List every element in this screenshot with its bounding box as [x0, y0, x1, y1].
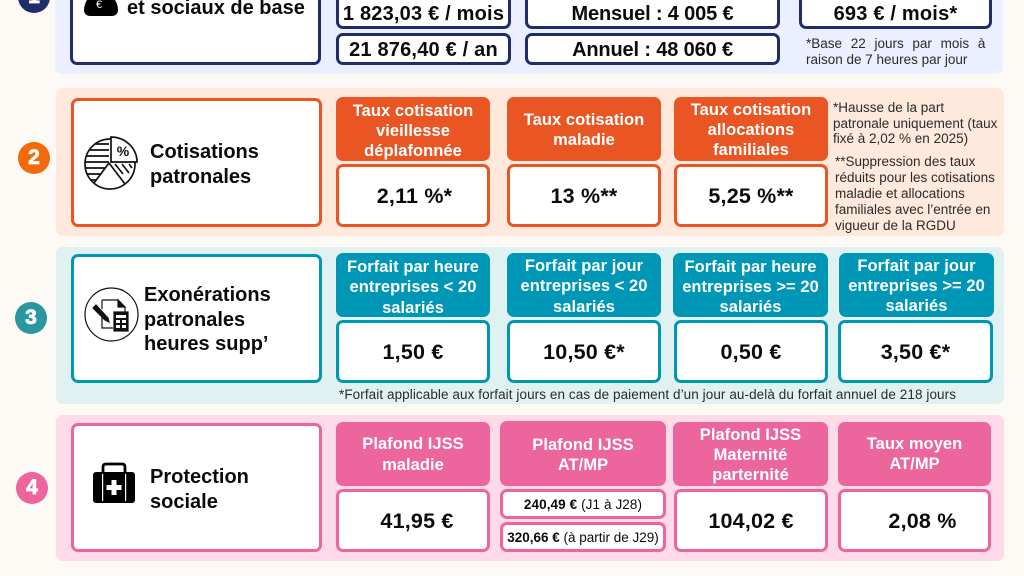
panel: protection sociale: [56, 415, 1004, 561]
value: 104,02: [674, 489, 828, 552]
value: 41,95: [336, 489, 490, 552]
footnote: suppression des taux: [835, 154, 995, 233]
footnote: suppression des taux: familiales avec l’entrée en: [835, 202, 990, 217]
value: 320,66: 320,66 € (à partir de J29): [507, 530, 659, 544]
heading: cotisations patronales: patronales: [150, 166, 251, 188]
value: 240,49: 240,49 € (J1 à J28): [524, 497, 642, 512]
icon: first aid kit: [93, 462, 135, 503]
value: 3,50: [838, 320, 993, 383]
header: maladie: [507, 97, 661, 161]
header: IJSS maternite: Plafond IJSS: [700, 426, 801, 444]
footnote: suppression des taux: réduits pour les cotisations: [835, 170, 995, 185]
heading: cotisations patronales: Cotisations: [150, 141, 259, 163]
footnote: base 22 jours: [806, 36, 986, 67]
header: allocations familiales: [674, 97, 828, 161]
header: forfait heure 20 et plus: salariés: [720, 298, 781, 316]
header: forfait heure moins de 20: Forfait par heure: [347, 258, 479, 276]
header: forfait heure moins de 20: entreprises < 20: [350, 278, 476, 296]
header: taux moyen: AT/MP: [889, 455, 940, 473]
value: salaire mois: [336, 0, 511, 29]
header: allocations familiales: Taux cotisation: [691, 101, 811, 119]
heading: exonerations patronales: heures supp’: [144, 333, 268, 355]
value: annuel: [525, 33, 780, 65]
header: forfait heure 20 et plus: entreprises >= 20: [682, 278, 819, 296]
value: 1,50: [336, 320, 490, 383]
value: 2,08: [838, 489, 991, 552]
value: vieillesse: 2,11 %*: [377, 184, 452, 208]
header: IJSS AT/MP: Plafond IJSS: [532, 436, 634, 454]
footnote: hausse part patronale: *Hausse de la part: [833, 100, 944, 115]
number badge 3: [15, 302, 47, 334]
header: forfait jour moins de 20: entreprises < 20: [521, 277, 647, 295]
header: forfait jour 20 et plus: Forfait par jour: [857, 257, 976, 275]
number badge 4: 4: [26, 476, 38, 499]
header: forfait heure 20 et plus: [673, 253, 828, 317]
footnote: forfait jours: *Forfait applicable aux forfait jours en cas de paiement d’un jour au-delà du forfait annuel de 218 jours: [339, 387, 956, 402]
footnote: suppression des taux: vigueur de la RGDU: [835, 218, 956, 233]
header: allocations familiales: allocations: [708, 121, 794, 139]
icon: money bag: [84, 0, 118, 16]
panel: cotisations patronales: [56, 88, 1004, 236]
number badge 2: [18, 142, 50, 174]
header: forfait jour 20 et plus: salariés: [886, 297, 947, 315]
header: IJSS maternite: parternité: [712, 466, 789, 484]
header: IJSS maladie: maladie: [382, 456, 444, 474]
footnote: suppression des taux: maladie et allocations: [835, 186, 965, 201]
heading: protection sociale: [150, 466, 249, 513]
title box: protection sociale: [71, 423, 322, 552]
value: 0,50: 0,50 €: [720, 340, 781, 364]
icon: document and calculator: [84, 287, 139, 342]
header: IJSS maternite: Maternité: [714, 446, 787, 464]
header: taux moyen: Taux moyen: [867, 435, 962, 453]
number badge 3: 3: [25, 306, 37, 329]
heading: exonerations patronales: patronales: [144, 309, 245, 331]
panel: salaires de base: [55, 0, 1003, 74]
value: 320,66: [500, 522, 666, 552]
header: maladie: Taux cotisation: [524, 111, 644, 129]
header: forfait jour moins de 20: [507, 253, 661, 317]
footnote: base 22 jours: *Base 22 jours par mois à: [806, 36, 985, 51]
value: mensuel: Mensuel : 4 005 €: [572, 3, 733, 25]
header: IJSS maternite: [673, 422, 828, 486]
value: 41,95: 41,95 €: [380, 508, 454, 532]
value: maladie: 13 %**: [551, 184, 617, 208]
title box: cotisations patronales: [71, 98, 322, 227]
value: maladie: [507, 164, 661, 227]
header: IJSS maladie: Plafond IJSS: [362, 435, 464, 453]
heading: exonerations patronales: [144, 284, 271, 355]
title box: exonerations: [71, 254, 322, 383]
value: allocations familiales: 5,25 %**: [708, 184, 794, 208]
value: annuel: Annuel : 48 060 €: [572, 38, 733, 60]
header: vieillesse: [336, 97, 490, 161]
header: allocations familiales: familiales: [713, 141, 789, 159]
value: mensuel: [525, 0, 780, 29]
header: forfait heure 20 et plus: Forfait par heure: [684, 258, 816, 276]
footnote: hausse part patronale: patronale uniquement (taux: [833, 116, 997, 131]
header: IJSS AT/MP: AT/MP: [558, 456, 608, 474]
header: forfait jour moins de 20: salariés: [553, 298, 615, 316]
title box: salaires et sociaux de base: [70, 0, 321, 65]
heading: exonerations patronales: Exonérations: [144, 284, 271, 306]
footnote: hausse part patronale: [833, 100, 998, 146]
value: salaire an: 21 876,40 € / an: [349, 38, 498, 60]
header: taux moyen: [838, 422, 991, 486]
value: 3,50: 3,50 €*: [881, 340, 950, 364]
header: forfait jour 20 et plus: entreprises >= 20: [848, 277, 985, 295]
heading: cotisations patronales: [150, 141, 259, 188]
value: 10,50: [507, 320, 661, 383]
value: 1,50: 1,50 €: [382, 340, 443, 364]
number badge 2: 2: [28, 146, 40, 169]
value: salaire mois: 1 823,03 € / mois: [343, 3, 504, 25]
value: allocations familiales: [674, 164, 828, 227]
value: vieillesse: [336, 164, 490, 227]
header: forfait heure moins de 20: [336, 253, 490, 317]
footnote: base 22 jours: raison de 7 heures par jour: [806, 52, 967, 67]
heading: protection sociale: sociale: [150, 491, 218, 513]
header: vieillesse: vieillesse: [376, 122, 450, 140]
value: 240,49: [500, 489, 666, 519]
value: 104,02: 104,02 €: [708, 508, 794, 532]
heading: protection sociale: Protection: [150, 466, 249, 488]
value: 693 euros par mois: [799, 0, 992, 29]
header: maladie: maladie: [553, 131, 615, 149]
header: vieillesse: Taux cotisation: [353, 102, 473, 120]
panel: exonerations: [56, 247, 1004, 404]
value: 693 euros par mois: 693 € / mois*: [834, 3, 957, 25]
icon: pie chart: %: [117, 143, 130, 159]
header: forfait heure moins de 20: salariés: [382, 299, 444, 317]
footnote: suppression des taux: **Suppression des taux: [835, 154, 975, 169]
header: IJSS maladie: [336, 422, 490, 486]
icon: pie chart: [84, 136, 138, 190]
header: vieillesse: déplafonnée: [364, 142, 462, 160]
number badge 4: [16, 472, 48, 504]
value: salaire an: [336, 33, 511, 65]
header: IJSS AT/MP: [500, 421, 666, 486]
number badge 1: [18, 0, 50, 13]
footnote: hausse part patronale: fixé à 2,02 % en 2025): [833, 131, 968, 146]
value: 2,08: 2,08 %: [888, 508, 957, 532]
header: forfait jour moins de 20: Forfait par jour: [525, 257, 643, 275]
value: 0,50: [674, 320, 828, 383]
header: forfait jour 20 et plus: [839, 253, 994, 317]
value: 10,50: 10,50 €*: [543, 340, 625, 364]
